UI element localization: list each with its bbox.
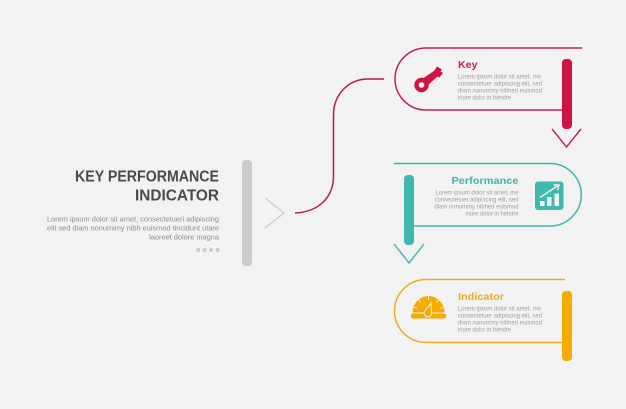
panel: key — [395, 48, 582, 147]
indicator text — [458, 306, 542, 334]
key text: Lorem ipsum dolor sit amet, me — [458, 74, 542, 80]
indicator bar — [562, 291, 572, 361]
performance text: iriure dolor in hendre — [466, 210, 519, 218]
grey vertical bar — [242, 160, 252, 266]
indicator text: diam nonummy nibhed euismod — [458, 320, 542, 326]
pagination dots — [196, 248, 219, 252]
key heading: Key — [458, 59, 478, 71]
performance bar — [404, 175, 414, 245]
key outline — [395, 48, 582, 110]
icon: rising bar chart — [535, 182, 564, 210]
indicator text: iriure dolor in hendre — [458, 326, 512, 334]
key text: consectetuer adipiscing elit, sed — [458, 80, 542, 88]
indicator outline — [395, 280, 565, 342]
indicator heading: Indicator — [458, 291, 504, 303]
connector curve — [295, 79, 384, 213]
performance text: diam nonummy nibhed euismod — [434, 204, 518, 210]
key text: diam nonummy nibhed euismod — [458, 88, 542, 94]
indicator text: Lorem ipsum dolor sit amet, me — [458, 306, 542, 312]
key text — [458, 74, 542, 102]
performance text: Lorem ipsum dolor sit amet, me — [436, 190, 519, 196]
key down arrow — [552, 129, 581, 147]
title: INDICATOR — [135, 188, 219, 204]
performance heading: Performance — [452, 175, 519, 187]
intro text block: laoreet dolore magna — [149, 232, 220, 242]
intro text block: Lorem ipsum dolor sit amet, consectetueri adipiscing — [47, 214, 219, 224]
intro text block — [47, 214, 220, 242]
indicator text: consectetuer adipiscing elit, sed — [458, 312, 542, 320]
performance text: consectetuer adipiscing elit, sed — [434, 196, 518, 204]
performance outline — [394, 164, 581, 226]
performance down arrow — [394, 244, 424, 263]
panel: indicator — [395, 280, 572, 361]
grey chevron arrow — [265, 198, 284, 228]
panel: performance — [394, 164, 581, 263]
title — [75, 168, 219, 204]
key bar — [562, 59, 572, 129]
intro text block: elit sed diam nonumimy nibh euismod tincidunt utare — [47, 224, 219, 232]
title: KEY PERFORMANCE — [75, 168, 219, 186]
key text: iriure dolor in hendre — [458, 94, 512, 102]
icon: key — [416, 66, 443, 90]
icon: gauge dashboard — [411, 296, 446, 318]
performance text — [434, 190, 519, 218]
